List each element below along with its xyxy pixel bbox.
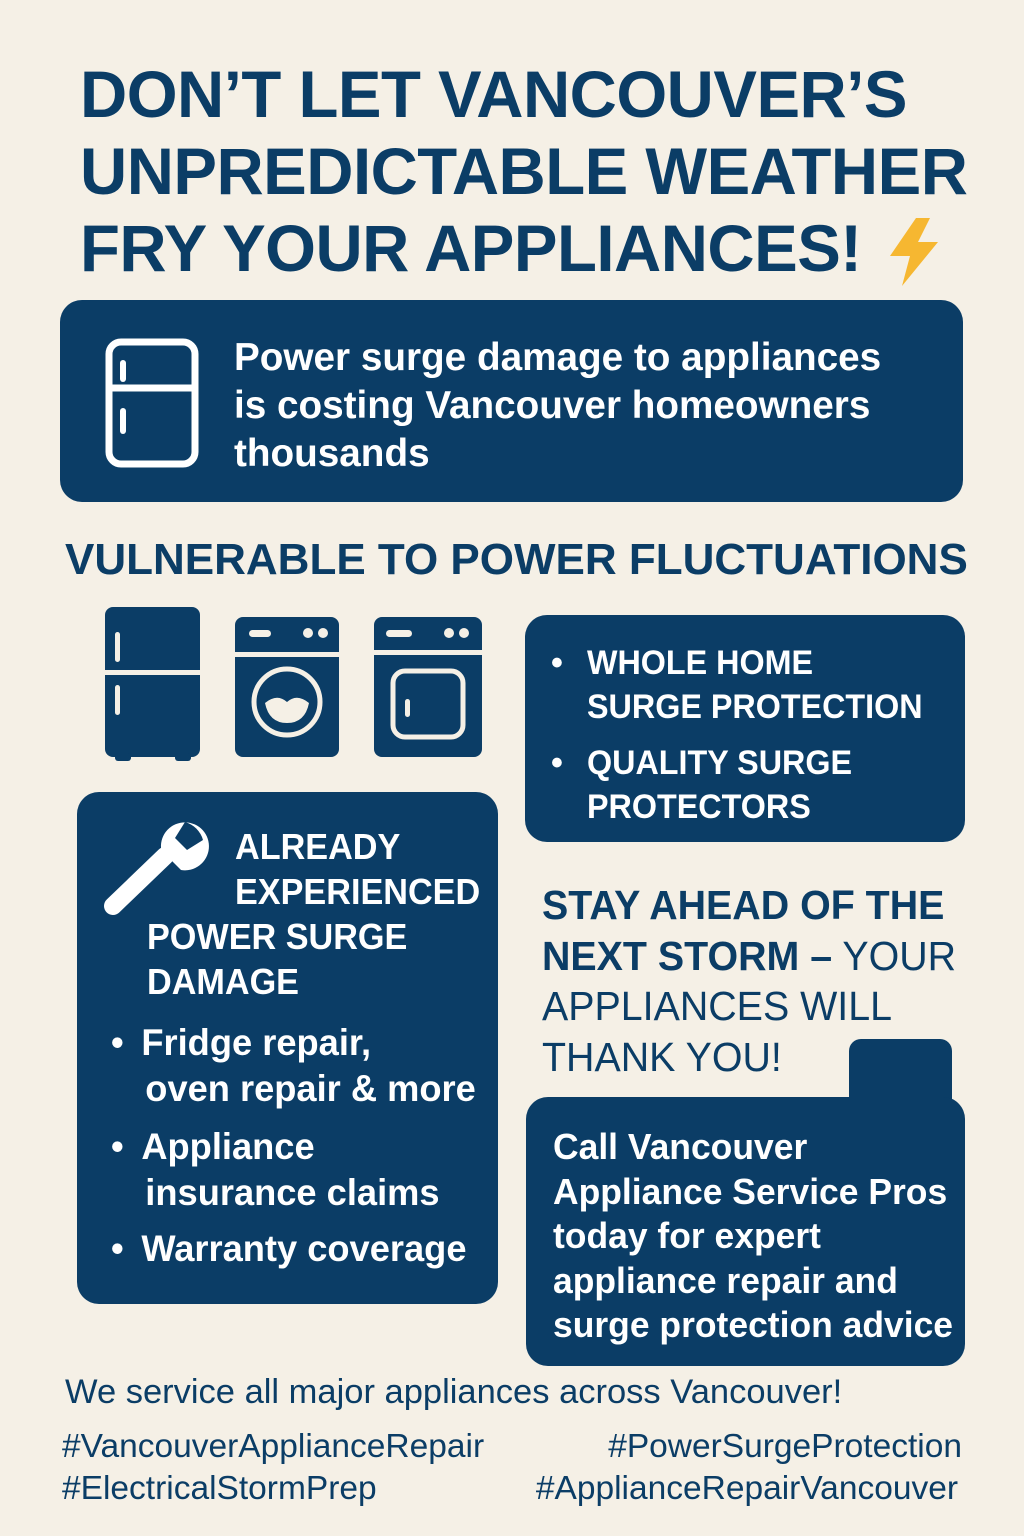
panel: already experienced damage xyxy=(77,792,498,1304)
panel: protection options: QUALITY SURGE xyxy=(587,744,852,782)
panel: call to action xyxy=(526,1097,965,1366)
panel: call to action: surge protection advice xyxy=(553,1304,953,1345)
hashtags: #ApplianceRepairVancouver xyxy=(536,1470,958,1507)
hashtags: #VancouverApplianceRepair xyxy=(62,1428,484,1465)
title: UNPREDICTABLE WEATHER xyxy=(80,134,967,208)
bullet: whole home xyxy=(551,644,923,726)
panel: already experienced damage: POWER SURGE xyxy=(147,916,407,957)
bullet: quality xyxy=(551,744,852,826)
heading: vulnerable: VULNERABLE TO POWER FLUCTUATIONS xyxy=(65,535,968,584)
icon: wrench xyxy=(104,822,209,915)
hashtags xyxy=(62,1428,962,1507)
icon: dryer xyxy=(374,617,482,757)
panel: call to action: Call Vancouver xyxy=(553,1126,807,1167)
icon: fridge xyxy=(105,607,200,761)
bullet: whole home: • xyxy=(551,644,563,682)
bullets: repair services xyxy=(111,1022,476,1269)
title: FRY YOUR APPLIANCES! xyxy=(80,211,862,285)
text: stay ahead: STAY AHEAD OF THE xyxy=(542,882,944,928)
panel: protection options: PROTECTORS xyxy=(587,788,811,826)
text: stay ahead: APPLIANCES WILL xyxy=(542,983,892,1029)
bullets: repair services: • Appliance xyxy=(111,1126,315,1167)
icon: fridge outline xyxy=(106,338,198,468)
panel: call to action: Appliance Service Pros xyxy=(553,1170,947,1212)
panel: protection options: SURGE PROTECTION xyxy=(587,688,923,726)
bullet: quality: • xyxy=(551,744,563,782)
decoration: tab xyxy=(849,1039,952,1119)
text: stay ahead xyxy=(542,882,956,1080)
panel: protection options xyxy=(525,615,965,842)
icon: lightning bolt xyxy=(890,218,938,286)
title xyxy=(80,57,967,285)
panel: cost banner xyxy=(60,300,963,502)
bullets: repair services: • Warranty coverage xyxy=(111,1228,466,1269)
bullets: repair services: oven repair & more xyxy=(145,1068,476,1109)
icon: washer xyxy=(235,617,339,757)
hashtags: #PowerSurgeProtection xyxy=(608,1428,962,1465)
heading: already experienced xyxy=(235,826,480,912)
bullets: repair services: insurance claims xyxy=(145,1172,440,1213)
title: DON’T LET VANCOUVER’S xyxy=(80,57,907,131)
panel: protection options: WHOLE HOME xyxy=(587,644,813,682)
text: cost message xyxy=(234,336,881,475)
hashtags: #ElectricalStormPrep xyxy=(62,1470,377,1507)
bullets: repair services: • Fridge repair, xyxy=(111,1022,371,1063)
text: cost message: Power surge damage to appliances xyxy=(234,336,881,379)
text: cost message: is costing Vancouver homeowners xyxy=(234,384,870,427)
text: cost message: thousands xyxy=(234,432,430,475)
panel: already experienced damage: DAMAGE xyxy=(147,961,299,1002)
text: stay ahead: THANK YOU! xyxy=(542,1034,782,1080)
heading: already experienced: ALREADY xyxy=(235,826,400,867)
text: stay ahead: NEXT STORM – YOUR xyxy=(542,932,956,978)
text: service area: We service all major appliances across Vancouver! xyxy=(65,1373,842,1411)
panel: call to action: today for expert xyxy=(553,1215,821,1256)
heading: already experienced: EXPERIENCED xyxy=(235,871,480,912)
panel: call to action: appliance repair and xyxy=(553,1260,898,1300)
